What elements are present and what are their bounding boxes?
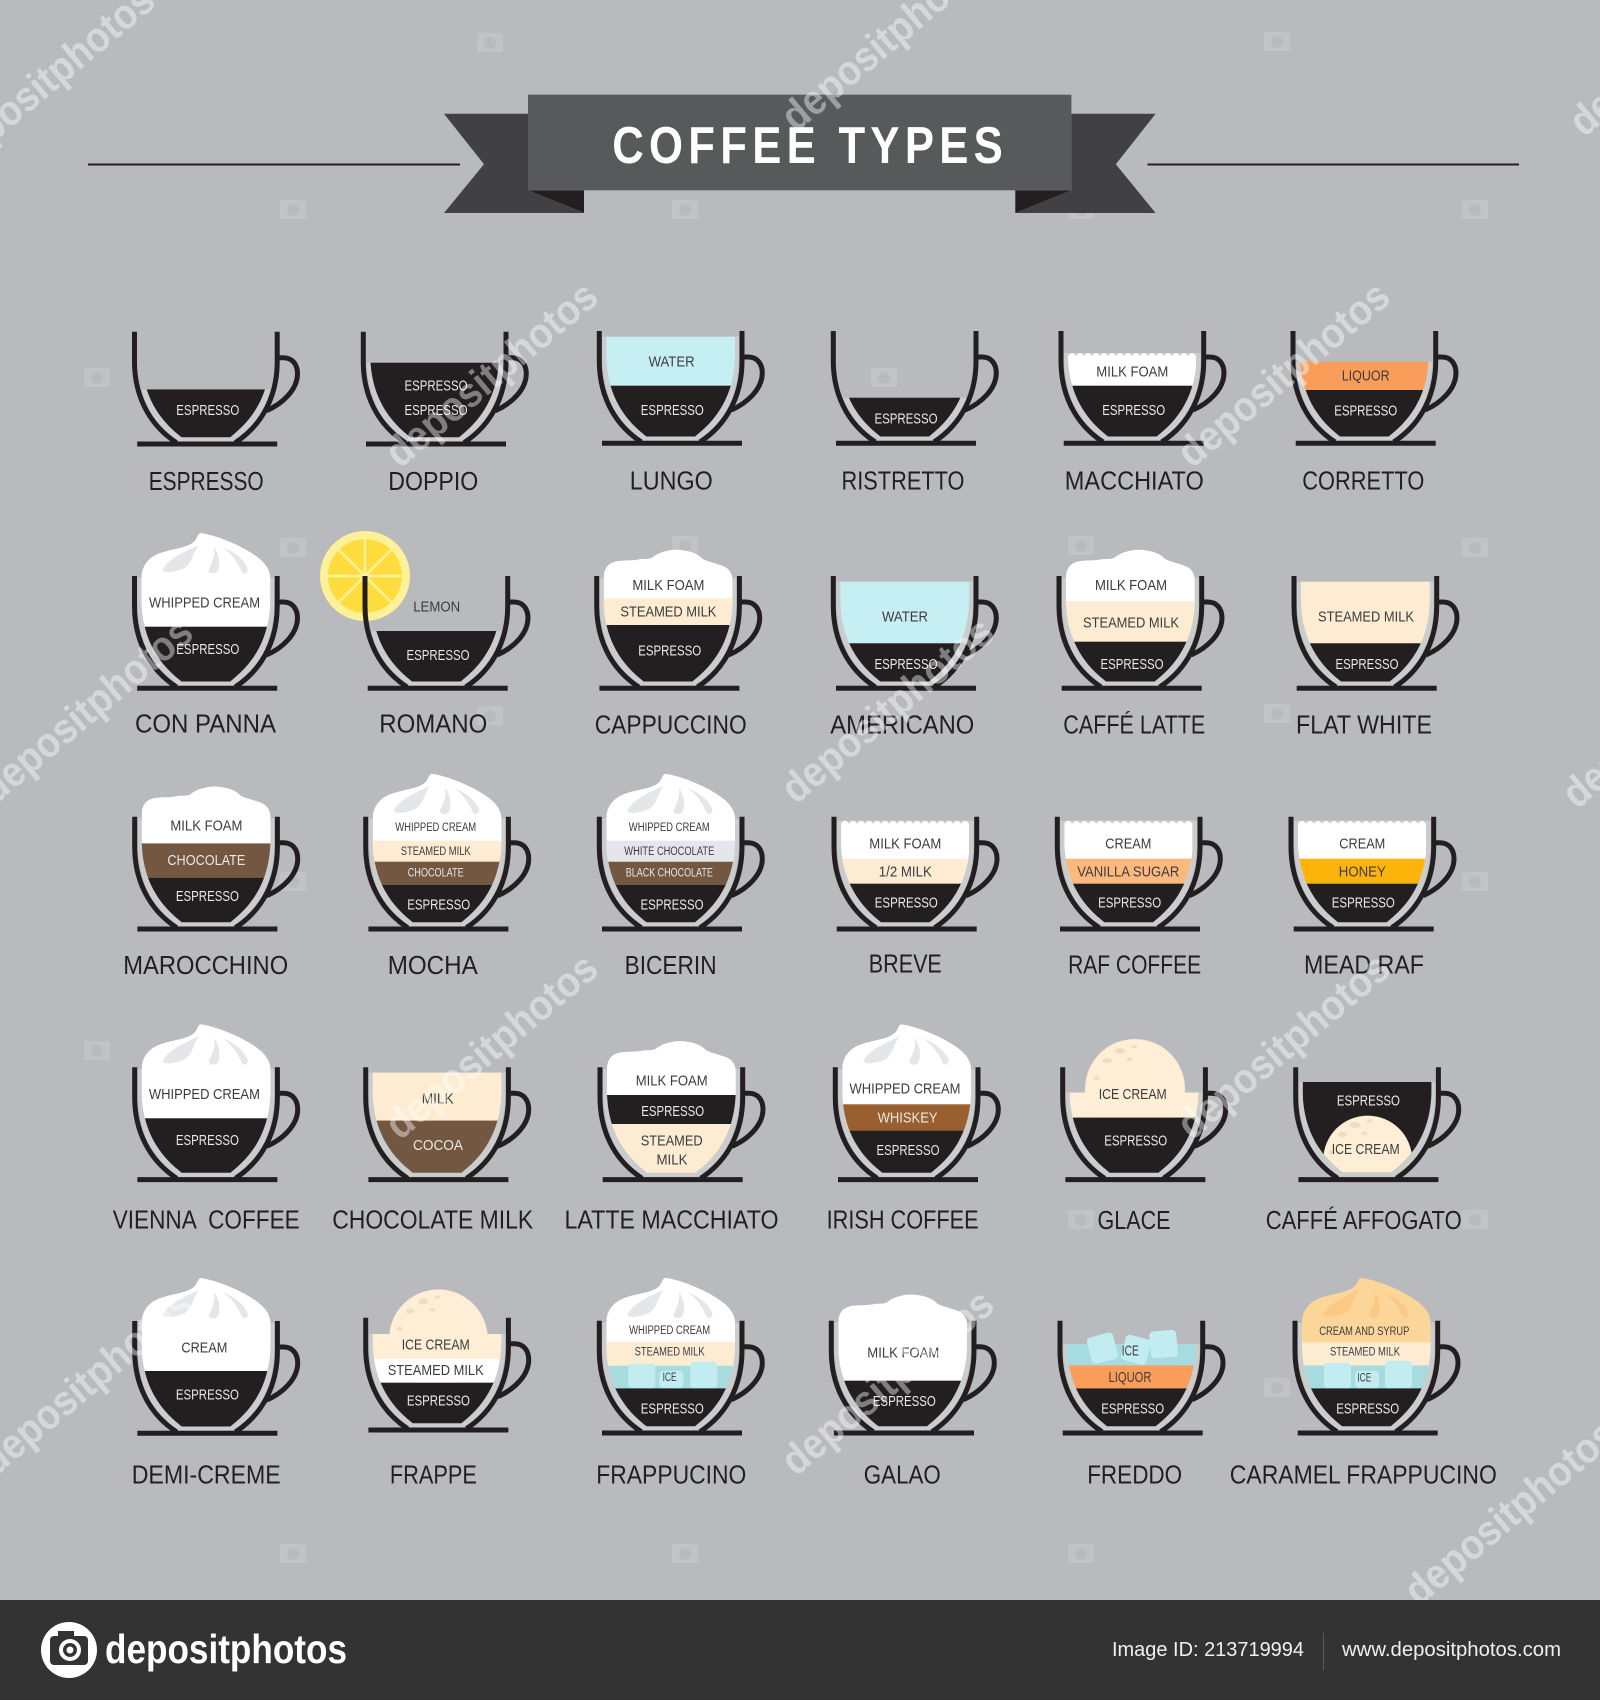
layers: whipped cream, white chocolate, black chocolate, espresso: WHIPPED CREAM	[629, 822, 710, 834]
layers: espresso, ice cream: ESPRESSO	[1337, 1093, 1400, 1110]
layers: whipped cream, whiskey, espresso: ESPRESSO	[876, 1142, 939, 1159]
layers: milk foam, steamed milk, espresso	[600, 550, 736, 686]
name: FRAPPE	[390, 1459, 477, 1489]
layers: ice, liquor, espresso: ICE	[1122, 1343, 1139, 1360]
name: AMERICANO	[830, 709, 974, 739]
name: BICERIN	[625, 950, 717, 980]
cup: Frappucino	[594, 1278, 762, 1489]
layers: milk foam, espresso, steamed milk: ESPRESSO	[641, 1103, 704, 1120]
layers: ice cream, steamed milk, espresso: STEAMED MILK	[388, 1362, 484, 1379]
layers: whipped cream, whiskey, espresso	[830, 1024, 985, 1184]
layers: whipped cream, whiskey, espresso: WHISKEY	[878, 1109, 938, 1126]
cup: Ristretto	[828, 331, 996, 495]
cup outline	[1061, 331, 1224, 443]
layers: cream, vanilla sugar, espresso	[1060, 820, 1197, 926]
cup outline	[835, 1067, 998, 1180]
layers: espresso	[142, 389, 270, 442]
layers: milk foam, half milk, espresso: MILK FOAM	[869, 835, 941, 852]
cup: Cappuccino	[592, 550, 760, 739]
name: LATTE MACCHIATO	[564, 1204, 778, 1234]
cup outline	[135, 817, 298, 929]
layers: water, espresso: WATER	[649, 354, 695, 371]
cup outline	[1293, 331, 1456, 443]
horizontal rule left	[88, 164, 460, 166]
layers: lemon label, espresso: ESPRESSO	[406, 647, 470, 664]
name: CORRETTO	[1302, 465, 1424, 495]
name: DOPPIO	[388, 466, 478, 496]
name: CAPPUCCINO	[595, 709, 747, 739]
name: ESPRESSO	[149, 466, 264, 496]
layers: whipped cream, white chocolate, black chocolate, espresso: BLACK CHOCOLATE	[626, 868, 713, 880]
cup outline	[833, 576, 996, 688]
cup outline	[834, 817, 997, 929]
layers: milk foam, steamed milk, espresso: STEAMED MILK	[1083, 614, 1179, 631]
cup: Raf Coffee	[1052, 817, 1220, 979]
layers: double espresso: ESPRESSO	[404, 378, 467, 395]
cup outline	[366, 1067, 529, 1180]
horizontal rule right	[1148, 164, 1519, 166]
layers: milk foam, espresso: MILK FOAM	[867, 1344, 939, 1361]
cup: Vienna Coffee	[113, 1024, 300, 1234]
cup outline	[1296, 1067, 1459, 1180]
cup: Galao	[826, 1295, 994, 1489]
layers: ice, liquor, espresso: ESPRESSO	[1101, 1400, 1164, 1417]
layers: whipped cream, steamed milk, chocolate, espresso	[369, 774, 506, 926]
layers: cream, honey, espresso	[1294, 820, 1430, 926]
layers: double espresso	[366, 362, 503, 442]
layers: whipped cream, steamed milk, ice, espresso: ESPRESSO	[641, 1400, 704, 1417]
cup outline	[134, 576, 298, 688]
layers: espresso: ESPRESSO	[874, 410, 937, 427]
name: CAFFÉ LATTE	[1063, 709, 1205, 739]
layers: ice cream, steamed milk, espresso	[361, 1289, 516, 1434]
layers: milk foam, steamed milk, espresso: STEAMED MILK	[620, 604, 716, 621]
name: MOCHA	[388, 950, 478, 980]
name: FREDDO	[1087, 1459, 1182, 1489]
name: BREVE	[869, 949, 942, 979]
layers: ice cream, espresso: ICE CREAM	[1099, 1086, 1167, 1103]
layers: milk foam, espresso	[826, 1295, 981, 1438]
layers: milk foam, steamed milk, espresso	[1062, 550, 1198, 686]
layers: cream, honey, espresso: ESPRESSO	[1332, 894, 1395, 911]
layers: steamed milk, espresso	[1297, 582, 1434, 686]
layers: whipped cream, steamed milk, chocolate, espresso: WHIPPED CREAM	[395, 822, 476, 834]
footer bar	[0, 1600, 1600, 1700]
name: RISTRETTO	[841, 465, 964, 495]
layers: milk foam, espresso: ESPRESSO	[1102, 402, 1165, 419]
layers: double espresso: ESPRESSO	[404, 402, 467, 419]
layers: whipped cream, espresso: WHIPPED CREAM	[149, 1086, 260, 1103]
watermarks: depositphotos	[1168, 943, 1398, 1148]
name: CHOCOLATE MILK	[332, 1204, 534, 1234]
name: GALAO	[864, 1459, 941, 1489]
cup: Freddo	[1055, 1321, 1223, 1489]
website: www.depositphotos.com	[1341, 1639, 1561, 1661]
cup outline	[363, 332, 526, 444]
cup: Corretto	[1288, 331, 1456, 495]
cup outline	[365, 576, 528, 688]
cup outline	[599, 1321, 762, 1433]
cup outline	[366, 1318, 529, 1430]
layers: whipped cream, espresso	[138, 533, 274, 686]
layers: cream, espresso: ESPRESSO	[176, 1386, 239, 1403]
cup outline	[599, 817, 762, 929]
cup outline	[135, 1321, 298, 1433]
cup outline	[135, 1067, 298, 1180]
layers: milk foam, chocolate, espresso: CHOCOLATE	[167, 852, 245, 869]
cup: Americano	[828, 576, 996, 739]
cup: Con Panna	[130, 533, 298, 739]
icon: lemon slice	[320, 531, 410, 621]
name: CAFFÉ AFFOGATO	[1266, 1205, 1462, 1235]
cup: Romano	[320, 531, 528, 739]
name: VIENNA COFFEE	[113, 1204, 300, 1234]
header ribbon banner	[88, 95, 1519, 213]
cup outline	[831, 1321, 994, 1433]
layers: whipped cream, espresso: WHIPPED CREAM	[149, 595, 260, 612]
layers: lemon label, espresso: LEMON	[413, 599, 460, 616]
name: MEAD RAF	[1304, 949, 1424, 979]
cup: Demi-Creme	[130, 1278, 298, 1489]
cup: Marocchino	[123, 787, 298, 980]
layers: cream and syrup, steamed milk, ice, espresso: ICE	[1357, 1373, 1372, 1385]
layers: milk foam, steamed milk, espresso: MILK FOAM	[1095, 577, 1167, 594]
name: FLAT WHITE	[1296, 709, 1432, 739]
layers: espresso: ESPRESSO	[176, 402, 239, 419]
layers: milk foam, espresso, steamed milk: MILK FOAM	[636, 1073, 708, 1090]
name: CON PANNA	[135, 709, 277, 739]
name: IRISH COFFEE	[827, 1204, 979, 1234]
layers: water, espresso	[602, 336, 739, 440]
layers: milk foam, steamed milk, espresso: ESPRESSO	[638, 643, 701, 660]
cup outline	[1057, 817, 1220, 929]
cup: Breve	[829, 817, 997, 979]
layers: whipped cream, steamed milk, chocolate, espresso: ESPRESSO	[407, 896, 470, 913]
layers: cream and syrup, steamed milk, ice, espresso	[1290, 1278, 1445, 1438]
layers: cream, vanilla sugar, espresso: ESPRESSO	[1098, 894, 1161, 911]
layers: whipped cream, espresso	[138, 1024, 274, 1177]
layers: milk foam, espresso, steamed milk	[595, 1041, 750, 1184]
name: RAF COFFEE	[1068, 949, 1201, 979]
layers: milk foam, espresso: ESPRESSO	[873, 1393, 936, 1410]
cup outline	[1291, 817, 1454, 929]
cup outline	[1295, 1321, 1458, 1433]
cup: Irish Coffee	[827, 1024, 998, 1234]
cup: Chocolate Milk	[332, 1067, 534, 1234]
layers: cream and syrup, steamed milk, ice, espresso: CREAM AND SYRUP	[1319, 1326, 1410, 1338]
layers: water, espresso	[836, 582, 973, 686]
divider	[1323, 1633, 1324, 1670]
layers: milk foam, half milk, espresso: 1/2 MILK	[879, 864, 932, 881]
watermarks: depositphotos	[772, 607, 1002, 812]
layers: whipped cream, steamed milk, ice, espresso: WHIPPED CREAM	[629, 1325, 710, 1337]
layers: ice, liquor, espresso: LIQUOR	[1108, 1369, 1152, 1386]
layers: cream, espresso: CREAM	[181, 1339, 227, 1356]
layers: milk foam, steamed milk, espresso: MILK FOAM	[632, 577, 704, 594]
layers: whipped cream, steamed milk, chocolate, espresso: STEAMED MILK	[401, 846, 471, 858]
layers: ice cream, espresso: ESPRESSO	[1104, 1133, 1167, 1150]
layers: milk foam, chocolate, espresso	[138, 786, 274, 926]
cup: Glace	[1058, 1039, 1226, 1235]
layers: whipped cream, white chocolate, black chocolate, espresso: WHITE CHOCOLATE	[624, 846, 715, 858]
watermarks: depositphotos	[376, 943, 606, 1148]
name: ROMANO	[379, 709, 487, 739]
cup outline	[833, 331, 996, 443]
ribbon fold right	[1015, 190, 1071, 213]
layers: cream and syrup, steamed milk, ice, espresso: ESPRESSO	[1336, 1400, 1399, 1417]
layers: whipped cream, espresso: ESPRESSO	[176, 641, 239, 658]
layers: liquor, espresso: LIQUOR	[1342, 368, 1390, 385]
layers: milk foam, espresso, steamed milk: STEAMED	[641, 1133, 703, 1150]
layers: cream, honey, espresso: HONEY	[1339, 864, 1386, 881]
ribbon fold left	[528, 190, 584, 213]
name: CARAMEL FRAPPUCINO	[1230, 1459, 1497, 1489]
layers: espresso	[843, 398, 966, 440]
cup outline	[366, 817, 529, 929]
cup outline	[1059, 576, 1222, 688]
layers: whipped cream, whiskey, espresso: WHIPPED CREAM	[849, 1080, 960, 1097]
layers: milk foam, steamed milk, espresso: ESPRESSO	[1100, 656, 1164, 673]
layers: cream, vanilla sugar, espresso: VANILLA SUGAR	[1077, 864, 1179, 881]
logo wordmark: depositphotos	[105, 1626, 347, 1672]
cup: Caffe Affogato	[1266, 1067, 1462, 1235]
layers: milk, cocoa: MILK	[422, 1090, 454, 1107]
layers: whipped cream, white chocolate, black chocolate, espresso: ESPRESSO	[640, 896, 703, 913]
title: COFFEE TYPES	[612, 118, 1003, 175]
layers: ice cream, steamed milk, espresso: ICE CREAM	[402, 1336, 470, 1353]
cup outline	[1294, 576, 1457, 688]
ribbon tail left	[444, 114, 584, 213]
layers: whipped cream, espresso: ESPRESSO	[176, 1132, 239, 1149]
cup: Espresso	[130, 332, 298, 496]
cup outline	[600, 1067, 763, 1180]
name: DEMI-CREME	[132, 1459, 281, 1489]
layers: milk foam, chocolate, espresso: ESPRESSO	[176, 888, 239, 905]
cup: Lungo	[594, 331, 762, 495]
cup: Bicerin	[594, 774, 762, 980]
layers: milk foam, espresso: MILK FOAM	[1096, 364, 1168, 381]
cup: Frappe	[361, 1289, 529, 1489]
layers: whipped cream, steamed milk, chocolate, espresso: CHOCOLATE	[408, 868, 464, 880]
layers: whipped cream, steamed milk, ice, espresso: STEAMED MILK	[635, 1347, 705, 1359]
cup: Macchiato	[1056, 331, 1224, 495]
name: MACCHIATO	[1065, 465, 1204, 495]
layers: whipped cream, steamed milk, ice, espresso	[594, 1278, 749, 1438]
layers: espresso, ice cream	[1291, 1082, 1446, 1205]
layers: espresso, ice cream: ICE CREAM	[1332, 1141, 1400, 1158]
layers: ice cream, espresso	[1058, 1039, 1213, 1182]
layers: cream, espresso	[130, 1278, 285, 1438]
cup: Caramel Frappucino	[1230, 1278, 1497, 1489]
layers: milk foam, half milk, espresso: ESPRESSO	[875, 894, 938, 911]
watermarks: depositphotos	[1168, 271, 1398, 476]
watermarks: depositphotos	[772, 1279, 1002, 1484]
layers: water, espresso: ESPRESSO	[874, 656, 937, 673]
layers: cream and syrup, steamed milk, ice, espresso: STEAMED MILK	[1330, 1347, 1400, 1359]
cup: Flat White	[1289, 576, 1457, 739]
layers: ice, liquor, espresso	[1055, 1330, 1210, 1436]
layers: milk foam, espresso, steamed milk: MILK	[656, 1151, 688, 1168]
layers: milk foam, half milk, espresso	[837, 820, 974, 926]
layers: steamed milk, espresso: STEAMED MILK	[1318, 609, 1414, 626]
cup: Latte Macchiato	[564, 1041, 778, 1234]
image id: Image ID: 213719994	[1112, 1639, 1304, 1661]
layers: milk, cocoa: COCOA	[413, 1137, 463, 1154]
layers: cream, vanilla sugar, espresso: CREAM	[1105, 835, 1151, 852]
layers: milk, cocoa	[369, 1072, 506, 1177]
cup outline	[1060, 1321, 1223, 1433]
layers: lemon label, espresso	[372, 602, 502, 686]
layers: cream, honey, espresso: CREAM	[1339, 835, 1385, 852]
layers: water, espresso: ESPRESSO	[641, 402, 704, 419]
watermarks: depositphotos	[376, 271, 606, 476]
ribbon tail right	[1015, 114, 1156, 213]
cup: Doppio	[358, 332, 526, 496]
cup outline	[597, 576, 760, 688]
cup outline	[134, 332, 298, 444]
name: MAROCCHINO	[123, 950, 288, 980]
cup outline	[1063, 1067, 1226, 1180]
layers: milk foam, chocolate, espresso: MILK FOAM	[170, 818, 242, 835]
name: LUNGO	[630, 465, 713, 495]
cup: Mocha	[361, 774, 529, 980]
layers: milk foam, espresso	[1064, 353, 1200, 440]
name: GLACE	[1097, 1205, 1170, 1235]
cup: Mead Raf	[1286, 817, 1454, 979]
layers: steamed milk, espresso: ESPRESSO	[1336, 656, 1398, 673]
ribbon centre	[528, 95, 1071, 190]
layers: liquor, espresso: ESPRESSO	[1334, 402, 1397, 419]
layers: ice cream, steamed milk, espresso: ESPRESSO	[407, 1393, 470, 1410]
layers: whipped cream, white chocolate, black chocolate, espresso	[602, 774, 739, 926]
watermark camera icons	[84, 32, 1488, 1563]
cup outline	[599, 331, 762, 443]
name: FRAPPUCINO	[596, 1459, 746, 1489]
layers: water, espresso: WATER	[882, 609, 928, 626]
layers: whipped cream, steamed milk, ice, espresso: ICE	[663, 1372, 677, 1384]
cup: Caffe Latte	[1054, 550, 1222, 739]
layers: liquor, espresso	[1296, 362, 1432, 440]
icon: depositphotos logo	[41, 1622, 97, 1678]
